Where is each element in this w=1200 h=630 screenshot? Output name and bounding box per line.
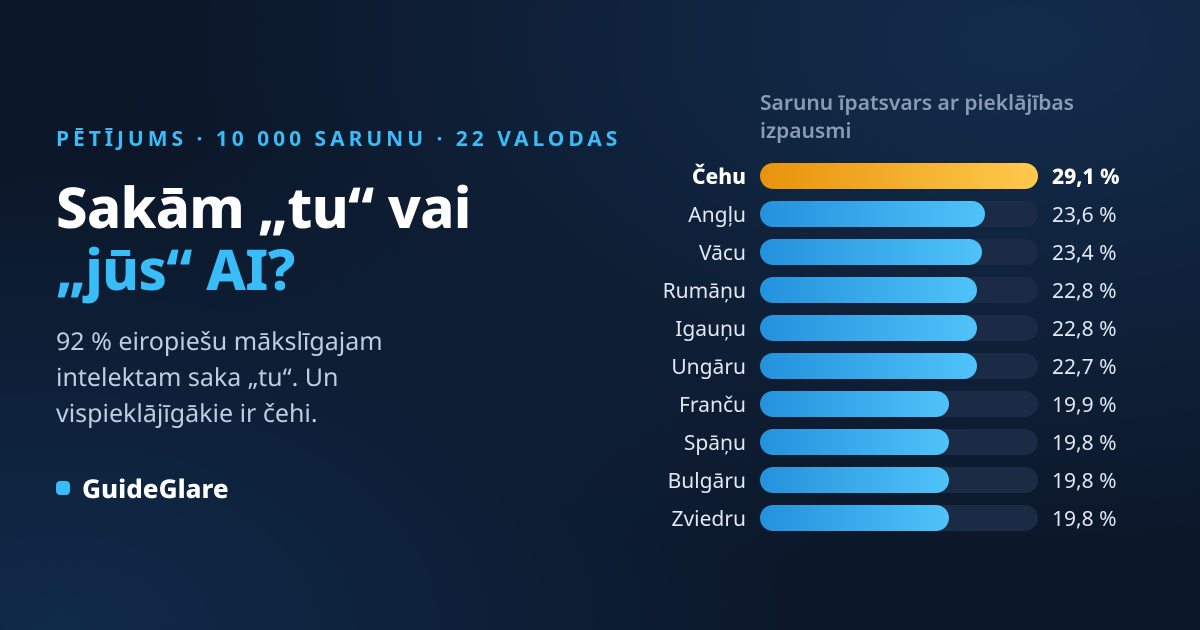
bar: Spāņu 19,8 %: Spāņu	[684, 429, 746, 457]
bar: Vācu 23,4 %: 23,4 %	[1052, 239, 1117, 267]
bar: Ungāru 22,7 %: Ungāru	[671, 353, 746, 381]
bar: Vācu 23,4 %	[699, 239, 1117, 267]
bar: Ungāru 22,7 %	[671, 353, 1117, 381]
bar: Angļu 23,6 %	[688, 201, 1117, 229]
bar: Bulgāru 19,8 %	[668, 467, 1117, 495]
bar: Bulgāru 19,8 %: Bulgāru	[668, 467, 746, 495]
description text: intelektam saka „tu“. Un	[56, 360, 339, 394]
bar: Spāņu 19,8 %	[684, 429, 1117, 457]
bar: Franču 19,9 %: Franču	[679, 391, 746, 419]
brand name: GuideGlare	[82, 470, 229, 506]
brand	[56, 470, 229, 506]
bar: Bulgāru 19,8 %: 19,8 %	[1052, 467, 1117, 495]
bar: Zviedru 19,8 %: Zviedru	[671, 505, 746, 533]
bar chart	[663, 163, 1119, 533]
bar: Rumāņu 22,8 %: Rumāņu	[663, 277, 746, 305]
description text	[56, 324, 383, 430]
description text: 92 % eiropiešu mākslīgajam	[56, 324, 383, 358]
bar: Rumāņu 22,8 %	[663, 277, 1117, 305]
eyebrow: study details: PĒTĪJUMS · 10 000 SARUNU · 22 VALODAS	[56, 125, 621, 153]
bar: Angļu 23,6 %: Angļu	[688, 201, 746, 229]
bar: Čehu 29,1 %	[692, 163, 1119, 191]
icon: brand square	[56, 481, 70, 495]
bar: Ungāru 22,7 %: 22,7 %	[1052, 353, 1117, 381]
bar: Spāņu 19,8 %: 19,8 %	[1052, 429, 1117, 457]
bar: Franču 19,9 %: 19,9 %	[1052, 391, 1117, 419]
title	[56, 169, 471, 307]
chart heading: izpausmi	[760, 117, 851, 145]
bar: Angļu 23,6 %: 23,6 %	[1052, 201, 1117, 229]
bar: Igauņu 22,8 %: 22,8 %	[1052, 315, 1117, 343]
bar: Zviedru 19,8 %: 19,8 %	[1052, 505, 1117, 533]
bar: Franču 19,9 %	[679, 391, 1117, 419]
bar: Čehu 29,1 %: Čehu	[692, 163, 746, 191]
bar: Igauņu 22,8 %: Igauņu	[675, 315, 746, 343]
chart heading: Sarunu īpatsvars ar pieklājības	[760, 89, 1074, 117]
bar: Čehu 29,1 %: 29,1 %	[1052, 163, 1119, 191]
bar: Vācu 23,4 %: Vācu	[699, 239, 746, 267]
bar: Igauņu 22,8 %	[675, 315, 1117, 343]
title: „jūs“ AI?	[56, 231, 295, 307]
description text: vispieklājīgākie ir čehi.	[56, 396, 318, 430]
bar: Rumāņu 22,8 %: 22,8 %	[1052, 277, 1117, 305]
title: Sakām „tu“ vai	[56, 169, 471, 245]
bar: Zviedru 19,8 %	[671, 505, 1117, 533]
chart heading	[760, 89, 1074, 145]
